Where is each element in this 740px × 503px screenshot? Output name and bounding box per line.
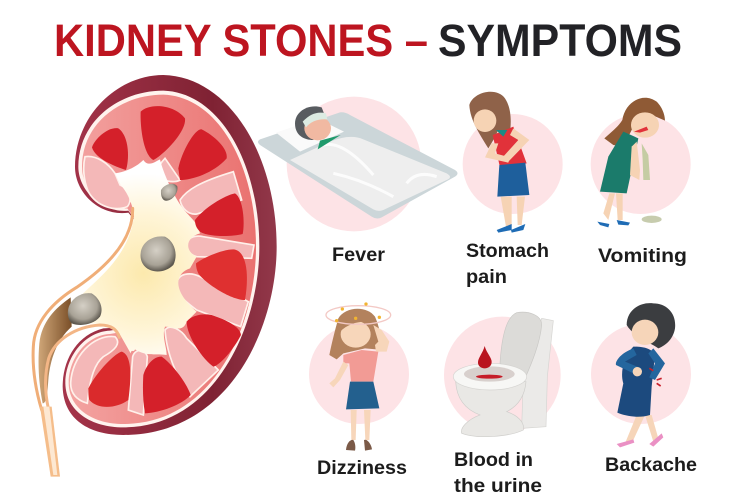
kidney capsule [63,75,277,435]
label: Vomiting: Vomiting [598,245,687,267]
blanket folds [323,144,437,197]
pink circle [463,114,563,214]
renal columns [71,156,254,415]
label: Blood in the urine [454,449,542,497]
renal cortex [69,95,256,424]
pink circle [444,317,561,433]
patient head [295,106,341,149]
pillow [276,121,344,152]
symptom: backache [591,303,691,447]
ureter [31,207,133,477]
symptom: dizziness [309,302,409,451]
blanket [290,137,450,211]
symptom: stomach pain [463,92,563,233]
kidney cross-section diagram [31,75,277,477]
label: Blood in the urine: the urine [454,475,542,497]
girl [469,92,529,233]
title: SYMPTOMS [438,15,682,66]
renal pelvis [68,159,200,355]
label: Fever: Fever [332,244,385,266]
girl [597,98,665,227]
pink circle [309,324,409,424]
symptom: blood in the urine [444,312,561,437]
title [54,15,682,66]
label: Backache: Backache [605,454,697,476]
label: Stomach pain: Stomach [466,240,549,262]
symptom: vomiting [591,98,691,227]
girl [326,302,391,451]
white inner lining [65,91,259,427]
blood drop [478,346,492,368]
pink circle [287,97,421,231]
pink circle [591,324,691,424]
stones [68,184,177,325]
label: Dizziness: Dizziness [317,457,407,479]
pink circle [591,114,691,214]
symptom: fever [258,97,457,231]
woman [616,303,675,447]
renal pyramids [88,106,247,413]
toilet [453,312,553,437]
label: Stomach pain: pain [466,266,507,288]
label: Stomach pain [466,240,549,288]
label: Blood in the urine: Blood in [454,449,533,471]
title: KIDNEY STONES – [54,15,428,66]
bed [258,112,457,219]
